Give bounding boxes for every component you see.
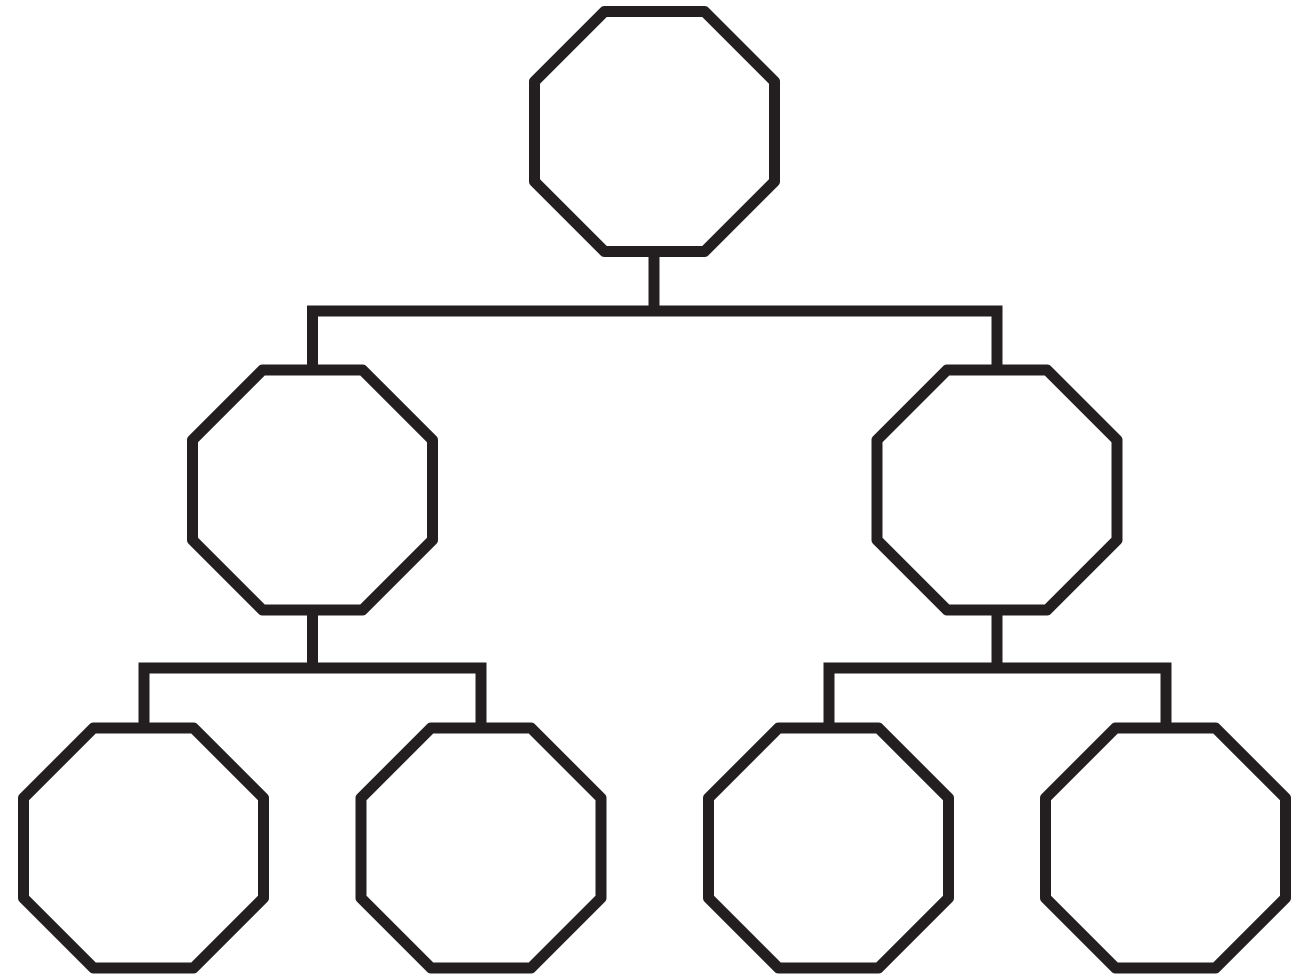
connector: left branch to leaves (144, 609, 481, 728)
octagon: root node (534, 12, 774, 252)
octagon: leaf three (708, 728, 948, 968)
octagon: level two right (877, 370, 1117, 610)
octagon: leaf one (24, 728, 264, 968)
octagon: level two left (192, 370, 432, 610)
connector: right branch to leaves (829, 609, 1166, 728)
octagon: leaf two (361, 728, 601, 968)
connector: root to level two (312, 251, 997, 370)
octagon: leaf four (1046, 728, 1286, 968)
